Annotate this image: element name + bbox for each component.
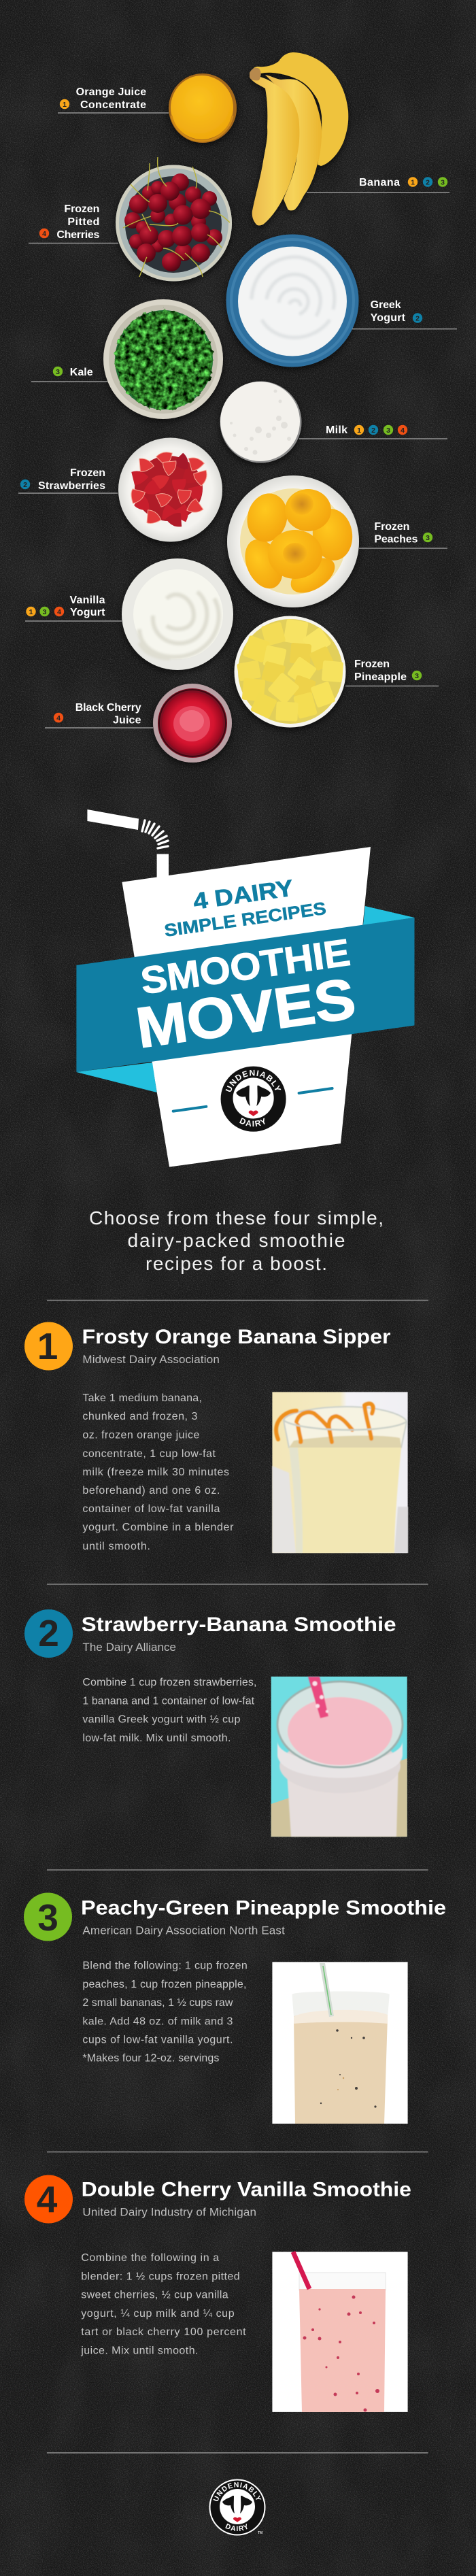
- label: milk: 2: [371, 426, 375, 435]
- label: frozen strawberries: 2: [23, 481, 27, 489]
- label: milk: [299, 424, 447, 439]
- ingredient: frozen pitted cherries: [29, 157, 232, 282]
- label: frozen peaches: 3: [426, 534, 430, 542]
- label: milk: 4: [401, 426, 405, 435]
- recipe instructions: tart or black cherry 100 percent: [81, 2326, 246, 2338]
- label: milk: 1: [357, 426, 361, 435]
- banner fold: top right: [363, 906, 415, 925]
- number badge 2: 2: [38, 1612, 59, 1654]
- label: milk: Milk: [326, 424, 347, 436]
- recipe instructions: Combine the following in a: [81, 2252, 219, 2264]
- logo: undeniably dairy: [220, 1067, 286, 1132]
- label: greek yogurt: [352, 299, 457, 329]
- label: frozen peaches: Peaches: [374, 533, 418, 546]
- number badge 4: [24, 2175, 73, 2223]
- label: banana: Banana: [359, 177, 400, 188]
- label: greek yogurt: Yogurt: [371, 312, 406, 324]
- ingredient: orange juice concentrate: [58, 73, 237, 143]
- label: vanilla yogurt: Vanilla: [69, 595, 105, 606]
- recipe instructions: Blend the following: 1 cup frozen: [82, 1960, 248, 1972]
- recipe instructions: blender: 1 ½ cups frozen pitted: [81, 2271, 240, 2283]
- label: frozen pitted cherries: Pitted: [67, 216, 99, 228]
- label: black cherry juice: [45, 702, 153, 728]
- label: orange juice concentrate: 1: [63, 101, 67, 109]
- heading: simple recipes: SIMPLE RECIPES: [163, 898, 327, 941]
- ingredient: milk: [220, 381, 447, 463]
- label: greek yogurt: Greek: [371, 299, 401, 311]
- number badge 3: [24, 1892, 72, 1941]
- logo: undeniably dairy footer: [209, 2479, 265, 2536]
- label: black cherry juice: 4: [56, 714, 61, 722]
- label: orange juice concentrate: Concentrate: [80, 99, 146, 111]
- recipe source: United Dairy Industry of Michigan: [82, 2205, 256, 2218]
- label: banana: 3: [441, 178, 445, 186]
- logo: undeniably dairy footer: UNDENIABLY: [214, 2482, 261, 2501]
- ingredient: frozen strawberries: [18, 438, 222, 541]
- icon: strawberries bowl: [118, 438, 222, 541]
- recipe source: The Dairy Alliance: [82, 1641, 176, 1654]
- ingredient: greek yogurt: [226, 234, 457, 367]
- recipe title: Frosty Orange Banana Sipper: [82, 1326, 391, 1348]
- ingredient: black cherry juice: [45, 684, 232, 763]
- cup body: [122, 847, 371, 1167]
- recipe instructions: [82, 1960, 248, 2064]
- heading: moves: MOVES: [132, 966, 359, 1060]
- recipe instructions: until smooth.: [82, 1541, 150, 1552]
- icon: glass of milk: [220, 381, 302, 463]
- ingredient: vanilla yogurt: [25, 558, 233, 670]
- icon: pineapple bowl: [234, 616, 345, 728]
- dash right: [299, 1088, 333, 1093]
- ingredient: banana: [250, 52, 449, 226]
- recipe title: Double Cherry Vanilla Smoothie: [82, 2178, 411, 2201]
- label: banana: 1: [411, 178, 415, 186]
- label: frozen pineapple: Pineapple: [354, 671, 407, 683]
- recipe source: American Dairy Association North East: [82, 1924, 285, 1937]
- label: greek yogurt: 2: [415, 314, 420, 322]
- title graphic: smoothie cup: [76, 809, 415, 1167]
- label: banana: [307, 177, 449, 193]
- label: vanilla yogurt: 1: [29, 608, 33, 616]
- label: frozen pitted cherries: 4: [42, 230, 46, 238]
- label: frozen strawberries: [18, 467, 118, 493]
- number badge 3: 3: [37, 1896, 58, 1939]
- recipe instructions: peaches, 1 cup frozen pineapple,: [82, 1979, 246, 1990]
- recipe instructions: yogurt, ¼ cup milk and ¼ cup: [81, 2308, 235, 2320]
- label: black cherry juice: Black Cherry: [75, 702, 141, 714]
- icon: greek yogurt bowl: [226, 234, 359, 367]
- icon: kale bowl: [103, 299, 223, 419]
- icon: vanilla yogurt bowl: [122, 558, 233, 670]
- label: frozen strawberries: Frozen: [70, 467, 105, 479]
- recipe instructions: *Makes four 12-oz. servings: [82, 2053, 219, 2064]
- photo: orange banana smoothie: [272, 1392, 408, 1553]
- label: vanilla yogurt: 3: [43, 608, 47, 616]
- recipe instructions: [82, 1677, 256, 1744]
- recipe instructions: low-fat milk. Mix until smooth.: [82, 1733, 231, 1744]
- recipe 4: double cherry vanilla smoothie: [24, 2175, 411, 2412]
- dash left: [173, 1107, 206, 1111]
- label: frozen pitted cherries: Cherries: [56, 229, 99, 241]
- label: vanilla yogurt: Yogurt: [70, 607, 105, 618]
- ingredient: frozen pineapple: [234, 616, 439, 728]
- number badge 1: 1: [37, 1325, 58, 1367]
- heading: smoothie: SMOOTHIE: [138, 931, 353, 1002]
- logo: undeniably dairy: DAIRY: [239, 1118, 265, 1126]
- label: vanilla yogurt: 4: [57, 608, 61, 616]
- icon: bananas: [250, 52, 348, 226]
- label: kale: [31, 367, 107, 382]
- recipe instructions: [82, 1392, 234, 1552]
- recipe instructions: Combine 1 cup frozen strawberries,: [82, 1677, 256, 1688]
- label: frozen pineapple: Frozen: [354, 658, 390, 670]
- recipe instructions: juice. Mix until smooth.: [80, 2345, 199, 2357]
- recipe instructions: cups of low-fat vanilla yogurt.: [82, 2035, 233, 2046]
- icon: cherries bowl: [116, 157, 232, 282]
- recipe 3: peachy-green pineapple smoothie: [24, 1892, 446, 2124]
- icon: straw: [87, 809, 169, 879]
- label: orange juice concentrate: Orange Juice: [76, 86, 146, 98]
- label: frozen peaches: [359, 521, 447, 548]
- recipe instructions: [80, 2252, 246, 2357]
- ingredient: kale: [31, 299, 223, 419]
- recipe 2: strawberry-banana smoothie: [24, 1609, 407, 1837]
- logo: undeniably dairy footer: DAIRY: [225, 2524, 248, 2531]
- recipe source: Midwest Dairy Association: [82, 1353, 220, 1366]
- banner: [76, 918, 415, 1072]
- intro text: [89, 1207, 384, 1274]
- number badge 1: [24, 1322, 73, 1370]
- recipe instructions: 1 banana and 1 container of low-fat: [82, 1695, 255, 1707]
- number badge 4: 4: [37, 2178, 58, 2220]
- recipe instructions: Take 1 medium banana,: [82, 1392, 202, 1404]
- recipe instructions: chunked and frozen, 3: [82, 1411, 197, 1422]
- icon: orange juice bowl: [169, 73, 237, 143]
- ingredient: frozen peaches: [227, 475, 447, 607]
- recipe instructions: 2 small bananas, 1 ½ cups raw: [82, 1997, 233, 2009]
- recipe instructions: sweet cherries, ½ cup vanilla: [81, 2290, 228, 2301]
- photo: peachy green smoothie: [272, 1962, 408, 2124]
- recipe instructions: beforehand) and one 6 oz.: [82, 1485, 220, 1496]
- icon: peaches bowl: [227, 475, 359, 607]
- label: frozen strawberries: Strawberries: [38, 480, 105, 492]
- intro text: recipes for a boost.: [146, 1253, 327, 1274]
- recipe instructions: milk (freeze milk 30 minutes: [82, 1467, 229, 1478]
- heading: 4 dairy: 4 DAIRY: [192, 875, 295, 915]
- photo: double cherry smoothie: [272, 2252, 408, 2412]
- recipe title: Peachy-Green Pineapple Smoothie: [81, 1897, 446, 1920]
- label: vanilla yogurt: [25, 595, 122, 621]
- recipe 1: frosty orange banana sipper: [24, 1322, 408, 1553]
- intro text: dairy-packed smoothie: [128, 1230, 345, 1251]
- label: black cherry juice: Juice: [113, 714, 141, 726]
- label: banana: 2: [426, 178, 430, 186]
- label: frozen pineapple: 3: [415, 672, 419, 680]
- recipe title: Strawberry-Banana Smoothie: [82, 1613, 396, 1636]
- number badge 2: [24, 1609, 73, 1658]
- recipe instructions: concentrate, 1 cup low-fat: [82, 1448, 216, 1460]
- label: frozen peaches: Frozen: [374, 521, 409, 533]
- photo: strawberry banana smoothie: [271, 1677, 407, 1837]
- logo: undeniably dairy footer: TM: [258, 2531, 262, 2535]
- recipe instructions: vanilla Greek yogurt with ½ cup: [82, 1714, 240, 1726]
- recipe instructions: container of low-fat vanilla: [82, 1503, 220, 1515]
- label: frozen pitted cherries: Frozen: [64, 203, 99, 215]
- recipe instructions: kale. Add 48 oz. of milk and 3: [82, 2015, 233, 2027]
- banner fold: bottom left: [76, 1063, 157, 1092]
- label: frozen pineapple: [345, 658, 439, 686]
- label: orange juice concentrate: [58, 86, 169, 113]
- icon: black cherry juice glass: [153, 684, 232, 763]
- logo: undeniably dairy: UNDENIABLY: [226, 1069, 282, 1092]
- label: kale: 3: [56, 368, 60, 376]
- recipe instructions: oz. frozen orange juice: [82, 1430, 199, 1441]
- recipe instructions: yogurt. Combine in a blender: [82, 1522, 234, 1533]
- label: frozen pitted cherries: [29, 203, 118, 244]
- intro text: Choose from these four simple,: [89, 1207, 384, 1228]
- label: milk: 3: [386, 426, 390, 435]
- label: kale: Kale: [70, 367, 93, 378]
